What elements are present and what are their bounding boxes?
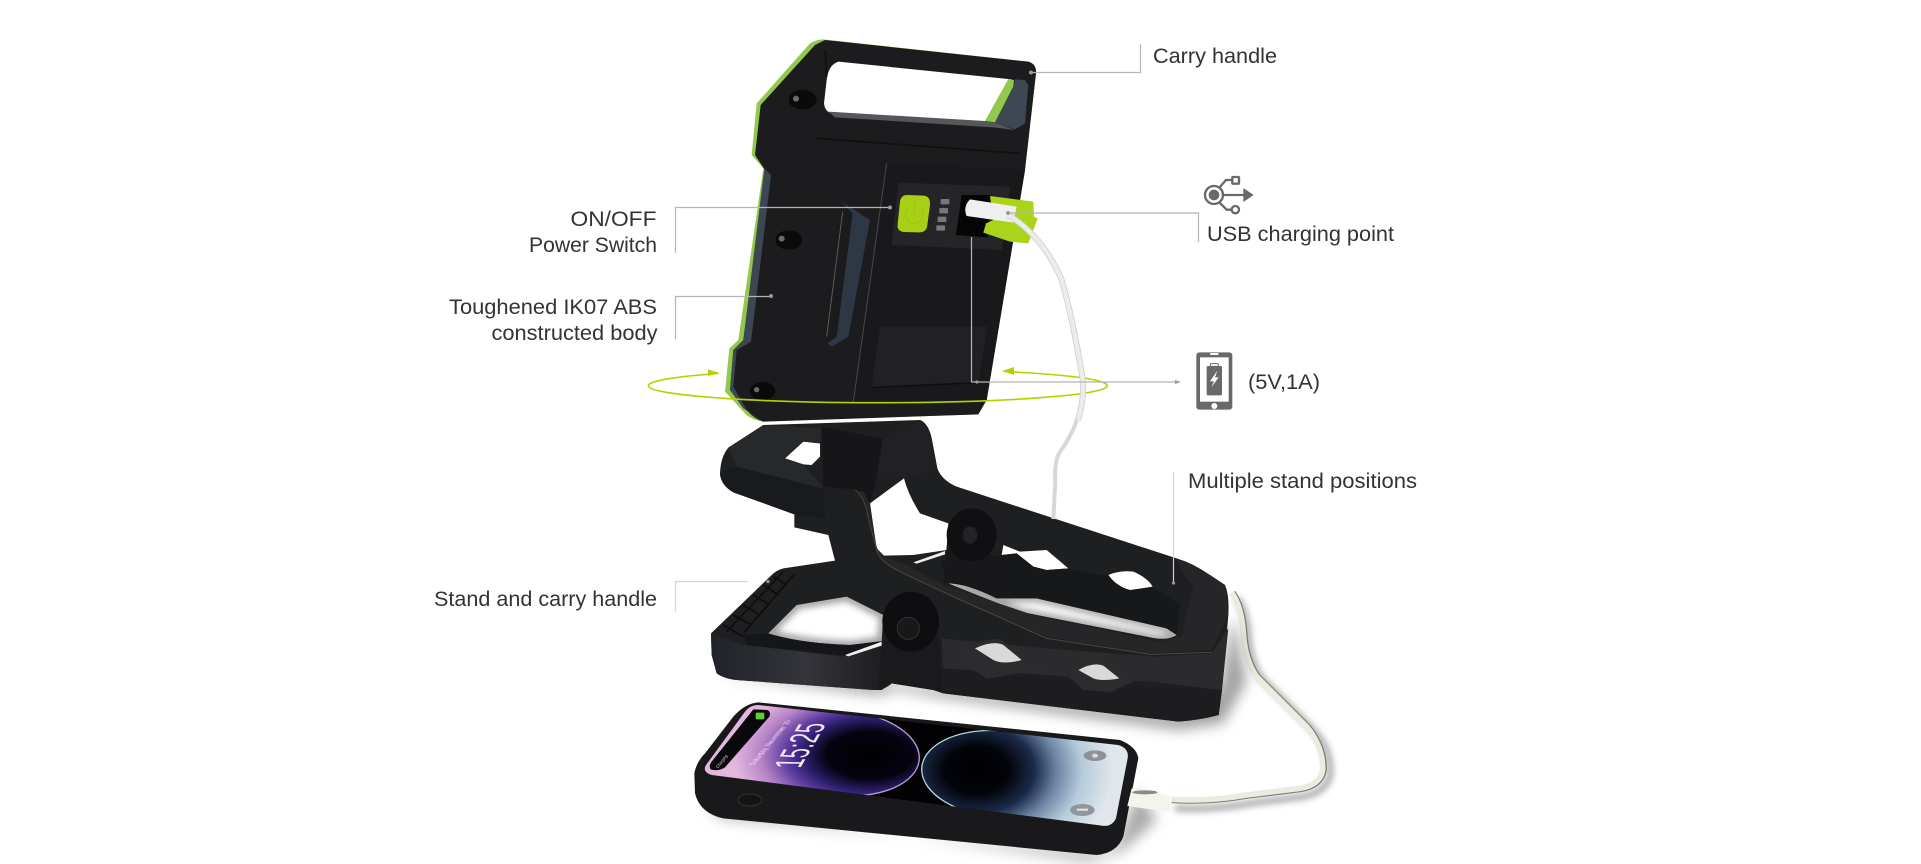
arm highlight line <box>855 490 1212 654</box>
label: carry handle: Carry handle <box>1153 45 1277 68</box>
wing top and front <box>728 425 823 488</box>
phone clock: 15:25 <box>764 723 835 768</box>
base grille ribs <box>723 572 795 637</box>
voltage leader <box>972 237 1178 382</box>
base front face <box>711 633 882 690</box>
stand lower face <box>943 668 1222 722</box>
body leader <box>676 296 771 339</box>
charging cable from unit <box>1008 215 1083 420</box>
usb leader <box>1008 213 1198 242</box>
stand leader <box>676 582 748 612</box>
frame inner dark <box>940 553 1180 635</box>
stand positions leader <box>1172 472 1174 583</box>
label: toughened: Toughened IK07 ABS <box>449 296 657 319</box>
charge level LEDs <box>936 199 949 231</box>
arm front lower face <box>942 628 1228 690</box>
handle opening <box>824 62 1012 122</box>
rubber cable clips <box>957 639 1133 692</box>
handle lower lip <box>828 112 1015 130</box>
leader dots and arrowhead <box>766 70 1181 585</box>
usb plug at phone <box>1127 788 1170 812</box>
label: multiple stand positions: Multiple stand positions <box>1188 470 1417 493</box>
base inner bar <box>743 633 882 656</box>
leader lines <box>676 44 1198 612</box>
case side button <box>738 794 762 806</box>
label: constructed body: constructed body <box>492 322 658 345</box>
carry handle leader <box>1031 44 1140 72</box>
power switch leader <box>676 208 890 253</box>
panel seam <box>853 163 887 402</box>
rotation ellipse arrows <box>648 367 1107 403</box>
phone <box>690 690 1170 862</box>
screws <box>750 90 817 400</box>
phone screen <box>704 705 1128 826</box>
cable behind stand <box>1053 408 1080 519</box>
label: voltage: (5V,1A) <box>1248 371 1320 394</box>
grip recess <box>823 202 870 347</box>
lock screen buttons <box>1070 750 1106 816</box>
work light body <box>725 39 1038 422</box>
lower label plate <box>872 327 987 387</box>
island charging text: Charging <box>715 753 729 769</box>
icon: usb symbol <box>1205 177 1254 213</box>
lower pivot pedestal <box>878 637 943 693</box>
label: power switch: Power Switch <box>529 234 657 257</box>
light rods <box>845 551 945 656</box>
label: usb charging point: USB charging point <box>1207 223 1394 246</box>
handle green inset <box>985 79 1014 122</box>
upper pivot knob <box>943 508 1000 583</box>
power button <box>898 195 930 232</box>
white usb plug <box>965 199 1017 223</box>
phone date: Saturday, November 19 <box>746 720 794 765</box>
arm top face <box>823 487 1228 653</box>
control strip <box>892 183 1010 250</box>
body dark shell <box>730 40 1036 422</box>
phone shadow <box>703 790 1157 862</box>
stand shadows <box>720 583 1247 730</box>
cable to phone with shadow <box>1172 593 1330 809</box>
handle ridge <box>817 50 1020 153</box>
handle blue inset <box>995 79 1028 129</box>
stand frame silhouette <box>711 420 1229 722</box>
label: on off: ON/OFF <box>570 208 656 231</box>
icon: phone battery <box>1196 352 1232 410</box>
lower pivot knob <box>882 592 939 652</box>
phone case <box>694 702 1138 855</box>
body green silhouette <box>725 39 1036 422</box>
island battery <box>756 713 764 719</box>
central stem <box>822 427 883 503</box>
stand and carry handle <box>711 408 1247 730</box>
green port cover <box>983 196 1038 243</box>
blue grey side strip <box>730 168 771 422</box>
infographic canvas <box>435 39 1416 864</box>
usb port <box>956 195 992 237</box>
dynamic island <box>710 709 770 770</box>
control panel recess <box>853 163 1025 402</box>
label: stand and carry handle: Stand and carry handle <box>434 588 657 611</box>
